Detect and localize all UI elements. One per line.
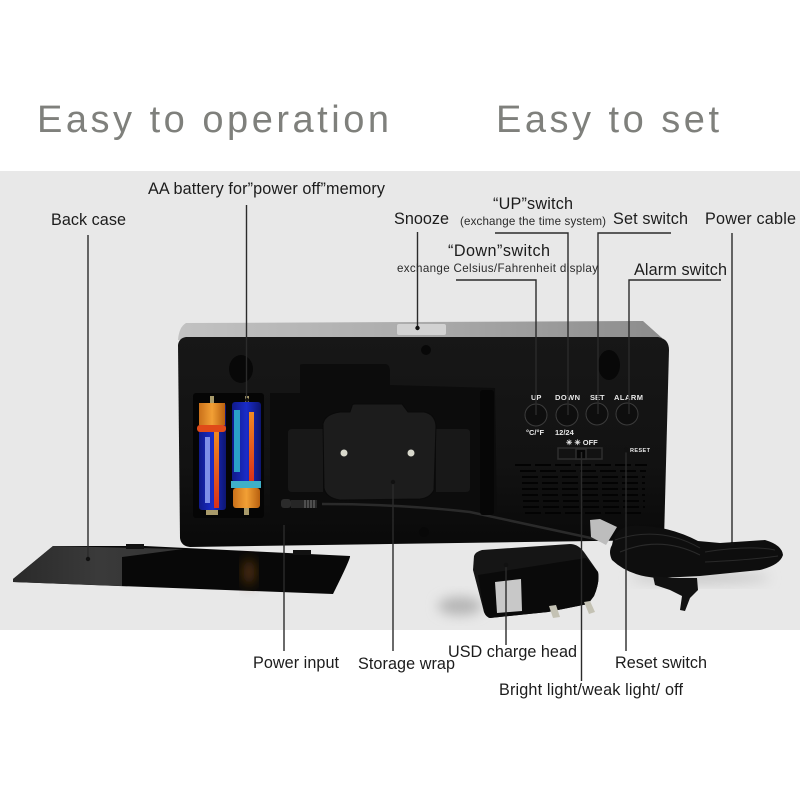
battery bay	[193, 393, 264, 518]
label: Bright light: Bright light/weak light/ off	[499, 681, 684, 699]
button markings: °C/°F	[526, 428, 544, 437]
label: UP switch: “UP”switch	[493, 195, 573, 213]
title: Easy to set: Easy to set	[496, 99, 719, 141]
AC adapter	[438, 544, 598, 618]
right battery	[231, 396, 261, 515]
label: Alarm switch: Alarm switch	[634, 261, 727, 279]
power plug pad	[323, 404, 436, 500]
title: Easy to operation: Easy to operation	[37, 99, 389, 141]
DC barrel plug	[653, 576, 698, 611]
label: Power input: Power input	[253, 654, 340, 672]
silver top edge	[178, 321, 662, 340]
button markings: SET	[590, 393, 605, 402]
label: Back case: Back case	[51, 211, 126, 229]
back cover	[13, 544, 350, 594]
leader line end dots	[86, 326, 734, 567]
clock back view	[178, 321, 669, 547]
label: Set switch: Set switch	[613, 210, 688, 228]
black back panel	[178, 337, 669, 547]
label: USD charge head: USD charge head	[448, 643, 577, 661]
coiled power cable	[590, 519, 783, 611]
button markings: RESET	[630, 448, 651, 454]
function buttons	[525, 403, 638, 426]
adapter label	[495, 579, 522, 613]
USB plug	[590, 519, 617, 545]
speaker grille	[515, 465, 647, 513]
hanging holes	[229, 345, 620, 537]
button markings: 12/24	[555, 428, 575, 437]
background band	[0, 171, 800, 630]
storage wrap holder	[288, 429, 470, 492]
button markings: UP	[531, 393, 541, 402]
button markings	[526, 393, 651, 454]
label: Power cable: Power cable	[705, 210, 796, 228]
label: Storage wrap: Storage wrap	[358, 655, 455, 673]
label: Reset switch: Reset switch	[615, 654, 707, 672]
label: AA battery: AA battery for”power off”memory	[148, 180, 386, 198]
label: UP switch description: (exchange the time system)	[460, 215, 606, 228]
label: Down switch: “Down”switch	[448, 242, 550, 260]
button markings: ALARM	[614, 393, 643, 402]
stored plug and cord	[281, 499, 600, 540]
button markings: ✳ ✳ OFF	[566, 438, 598, 447]
label: Snooze: Snooze	[394, 210, 449, 228]
button markings: DOWN	[555, 393, 580, 402]
adapter pins	[549, 605, 560, 618]
recessed storage area	[270, 364, 497, 521]
divider wall	[480, 390, 494, 515]
left battery	[197, 396, 226, 515]
label: Down switch description: exchange Celsius/Fahrenheit display	[397, 262, 598, 275]
brightness slider	[558, 448, 602, 459]
snooze button	[397, 324, 446, 335]
leader lines	[88, 205, 732, 681]
